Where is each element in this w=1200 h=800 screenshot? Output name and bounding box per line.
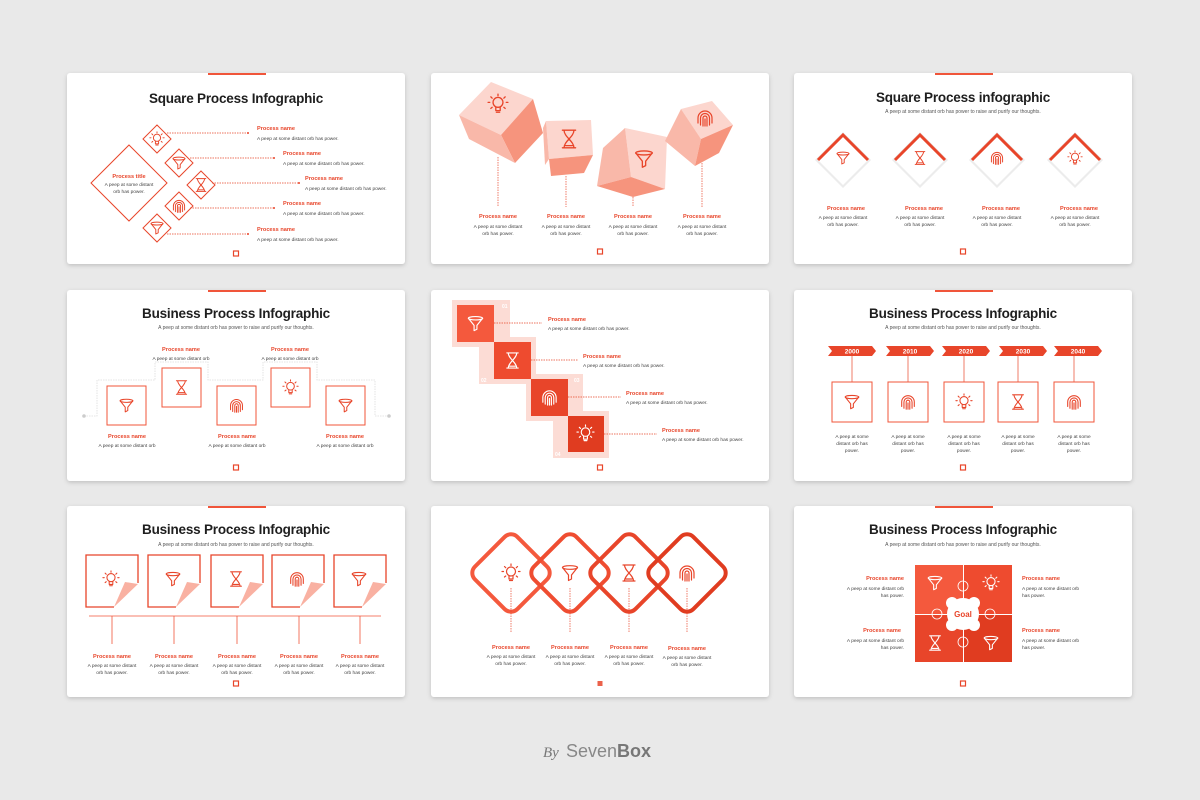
labels: orb has power.: [495, 661, 527, 667]
descriptions: A peep at some: [947, 434, 981, 440]
labels: A peep at some distant orb has power.: [662, 437, 744, 443]
title: Business Process Infographic: [142, 522, 331, 537]
step labels: Process name: [305, 176, 343, 182]
slide 7: peel boxes timeline: [67, 506, 405, 697]
labels: A peep at some distant: [819, 215, 868, 221]
labels: A peep at some distant: [546, 654, 595, 660]
labels: Process name: [548, 317, 586, 323]
descriptions: A peep at some: [835, 434, 869, 440]
cube labels: Process name: [479, 214, 517, 220]
slide 3: square process diamonds: A peep at some distant orb has power to raise and purify our thoughts.: [885, 109, 1041, 115]
labels: orb has power.: [981, 222, 1013, 228]
labels: Process name: [610, 645, 648, 651]
labels: [98, 347, 374, 449]
year banners: [828, 346, 1102, 356]
labels: Process name: [866, 576, 904, 582]
descriptions: distant orb has: [892, 441, 924, 447]
slide 5: staircase squares: 02: [481, 378, 487, 384]
labels: Process name: [326, 434, 364, 440]
slide 6: timeline years: A peep at some distant orb has power to raise and purify our thoughts.: [885, 325, 1041, 331]
labels: Process name: [162, 347, 200, 353]
labels: orb has power.: [827, 222, 859, 228]
labels: has power.: [1022, 593, 1045, 599]
labels: Process name: [827, 206, 865, 212]
slide 6: timeline years: 2040: [1071, 348, 1086, 356]
labels: A peep at some distant orb has power.: [548, 326, 630, 332]
cube 2: [543, 120, 593, 176]
slide 2: cubes: [431, 73, 769, 264]
labels: Process name: [218, 654, 256, 660]
labels: Process name: [218, 434, 256, 440]
labels: orb has power.: [554, 661, 586, 667]
slide 6: timeline years: 2010: [903, 348, 918, 356]
labels: Process name: [155, 654, 193, 660]
labels: Process name: [1022, 628, 1060, 634]
diamonds: [815, 132, 1103, 188]
labels: orb has power.: [1059, 222, 1091, 228]
slide 6: timeline years: 2030: [1016, 348, 1031, 356]
labels: A peep at some distant orb has power.: [626, 400, 708, 406]
slide 5: staircase squares: 01: [502, 304, 508, 310]
slide 5: staircase squares: [431, 290, 769, 481]
cube labels: Process name: [547, 214, 585, 220]
descriptions: power.: [957, 448, 971, 454]
cube labels: Process name: [614, 214, 652, 220]
cube labels: A peep at some distant: [678, 224, 727, 230]
labels: A peep at some distant orb: [847, 638, 904, 644]
labels: orb has power.: [96, 670, 128, 676]
labels: Process name: [662, 428, 700, 434]
labels: Process name: [1022, 576, 1060, 582]
step labels: A peep at some distant orb has power.: [283, 161, 365, 167]
labels: orb has power.: [158, 670, 190, 676]
labels: has power.: [881, 593, 904, 599]
title: Square Process infographic: [876, 90, 1051, 105]
puzzle: Goal: [954, 610, 972, 619]
descriptions: power.: [845, 448, 859, 454]
descriptions: A peep at some: [1001, 434, 1035, 440]
labels: A peep at some distant: [213, 663, 262, 669]
descriptions: [835, 434, 1091, 454]
big diamond: process title: [91, 145, 167, 221]
labels: Process name: [668, 646, 706, 652]
slide 6: timeline years: 2000: [845, 348, 860, 356]
big diamond: process title: A peep at some distant: [105, 182, 154, 188]
labels: Process name: [108, 434, 146, 440]
big diamond: process title: orb has power.: [113, 189, 145, 195]
slide 4: business process zigzag: [67, 290, 405, 481]
labels: orb has power.: [344, 670, 376, 676]
labels: A peep at some distant orb: [208, 443, 266, 449]
small diamonds with steps: [143, 125, 215, 242]
linked diamonds: [469, 531, 729, 615]
slide 9: puzzle goal: [794, 506, 1132, 697]
title: Business Process Infographic: [142, 306, 331, 321]
descriptions: power.: [1011, 448, 1025, 454]
labels: Process name: [583, 354, 621, 360]
descriptions: power.: [901, 448, 915, 454]
labels: A peep at some distant orb: [847, 586, 904, 592]
labels: A peep at some distant: [487, 654, 536, 660]
title: Business Process Infographic: [869, 306, 1058, 321]
labels: Process name: [271, 347, 309, 353]
cube labels: orb has power.: [482, 231, 514, 237]
labels: orb has power.: [904, 222, 936, 228]
footer brand: By: [543, 745, 559, 761]
title: Square Process Infographic: [149, 91, 324, 106]
step labels: Process name: [283, 201, 321, 207]
cube labels: [474, 214, 727, 237]
title: Business Process Infographic: [869, 522, 1058, 537]
descriptions: distant orb has: [1002, 441, 1034, 447]
labels: has power.: [1022, 645, 1045, 651]
labels: has power.: [881, 645, 904, 651]
labels: A peep at some distant orb: [261, 356, 319, 362]
cube 1: [459, 82, 543, 163]
descriptions: distant orb has: [948, 441, 980, 447]
labels: [88, 654, 385, 676]
labels: A peep at some distant: [663, 655, 712, 661]
cube 3: [597, 128, 667, 197]
labels: orb has power.: [613, 661, 645, 667]
labels: A peep at some distant: [150, 663, 199, 669]
labels: [819, 206, 1100, 228]
labels: Process name: [341, 654, 379, 660]
slide 7: peel boxes timeline: A peep at some distant orb has power to raise and purify our thoughts.: [158, 542, 314, 548]
timeline: [89, 616, 381, 644]
slide 5: staircase squares: 04: [555, 452, 561, 458]
descriptions: A peep at some: [891, 434, 925, 440]
cube labels: A peep at some distant: [474, 224, 523, 230]
boxes: [832, 382, 1094, 422]
big diamond: process title: Process title: [112, 174, 146, 180]
step labels: A peep at some distant orb has power.: [257, 237, 339, 243]
labels: A peep at some distant orb: [316, 443, 374, 449]
descriptions: distant orb has: [1058, 441, 1090, 447]
labels: Process name: [93, 654, 131, 660]
labels: A peep at some distant: [973, 215, 1022, 221]
labels: Process name: [905, 206, 943, 212]
labels: A peep at some distant: [896, 215, 945, 221]
pink frames: [452, 300, 609, 458]
labels: A peep at some distant orb: [152, 356, 210, 362]
cube labels: orb has power.: [686, 231, 718, 237]
slide 6: timeline years: [794, 290, 1132, 481]
cube labels: A peep at some distant: [609, 224, 658, 230]
labels: A peep at some distant: [605, 654, 654, 660]
step labels: A peep at some distant orb has power.: [257, 136, 339, 142]
labels: A peep at some distant: [275, 663, 324, 669]
labels: A peep at some distant orb has power.: [583, 363, 665, 369]
labels: Process name: [1060, 206, 1098, 212]
slide 6: timeline years: 2020: [959, 348, 974, 356]
cube labels: Process name: [683, 214, 721, 220]
labels: orb has power.: [221, 670, 253, 676]
cube labels: A peep at some distant: [542, 224, 591, 230]
step labels: A peep at some distant orb has power.: [283, 211, 365, 217]
labels: A peep at some distant orb: [98, 443, 156, 449]
slide 4: business process zigzag: A peep at some distant orb has power to raise and purify our thoughts.: [158, 325, 314, 331]
connector: [84, 362, 389, 416]
puzzle: [915, 565, 1012, 662]
labels: [847, 576, 1079, 651]
cube labels: orb has power.: [617, 231, 649, 237]
step labels: Process name: [257, 126, 295, 132]
labels: A peep at some distant: [1051, 215, 1100, 221]
slide 9: puzzle goal: A peep at some distant orb has power to raise and purify our thoughts.: [885, 542, 1041, 548]
step labels: A peep at some distant orb has power.: [305, 186, 387, 192]
labels: Process name: [626, 391, 664, 397]
labels: [487, 645, 712, 668]
labels: A peep at some distant: [336, 663, 385, 669]
boxes: [107, 368, 365, 425]
labels: Process name: [982, 206, 1020, 212]
descriptions: A peep at some: [1057, 434, 1091, 440]
labels: Process name: [280, 654, 318, 660]
labels: A peep at some distant: [88, 663, 137, 669]
slide 3: square process diamonds: [794, 73, 1132, 264]
peel boxes: [86, 555, 386, 607]
slide 8: linked rounded diamonds: [431, 506, 769, 697]
labels: A peep at some distant orb: [1022, 638, 1079, 644]
labels: orb has power.: [671, 662, 703, 668]
slide 5: staircase squares: 03: [574, 378, 580, 384]
footer brand: SevenBox: [566, 741, 651, 761]
step labels: Process name: [283, 151, 321, 157]
slide 1: square process infographic: [67, 73, 405, 264]
labels: orb has power.: [283, 670, 315, 676]
labels: Process name: [551, 645, 589, 651]
labels: Process name: [492, 645, 530, 651]
descriptions: distant orb has: [836, 441, 868, 447]
labels: Process name: [863, 628, 901, 634]
squares: [457, 305, 604, 452]
labels: A peep at some distant orb: [1022, 586, 1079, 592]
step labels: Process name: [257, 227, 295, 233]
step labels: [257, 126, 387, 243]
cube 4: [665, 101, 733, 166]
labels: [548, 317, 744, 443]
cube labels: orb has power.: [550, 231, 582, 237]
descriptions: power.: [1067, 448, 1081, 454]
